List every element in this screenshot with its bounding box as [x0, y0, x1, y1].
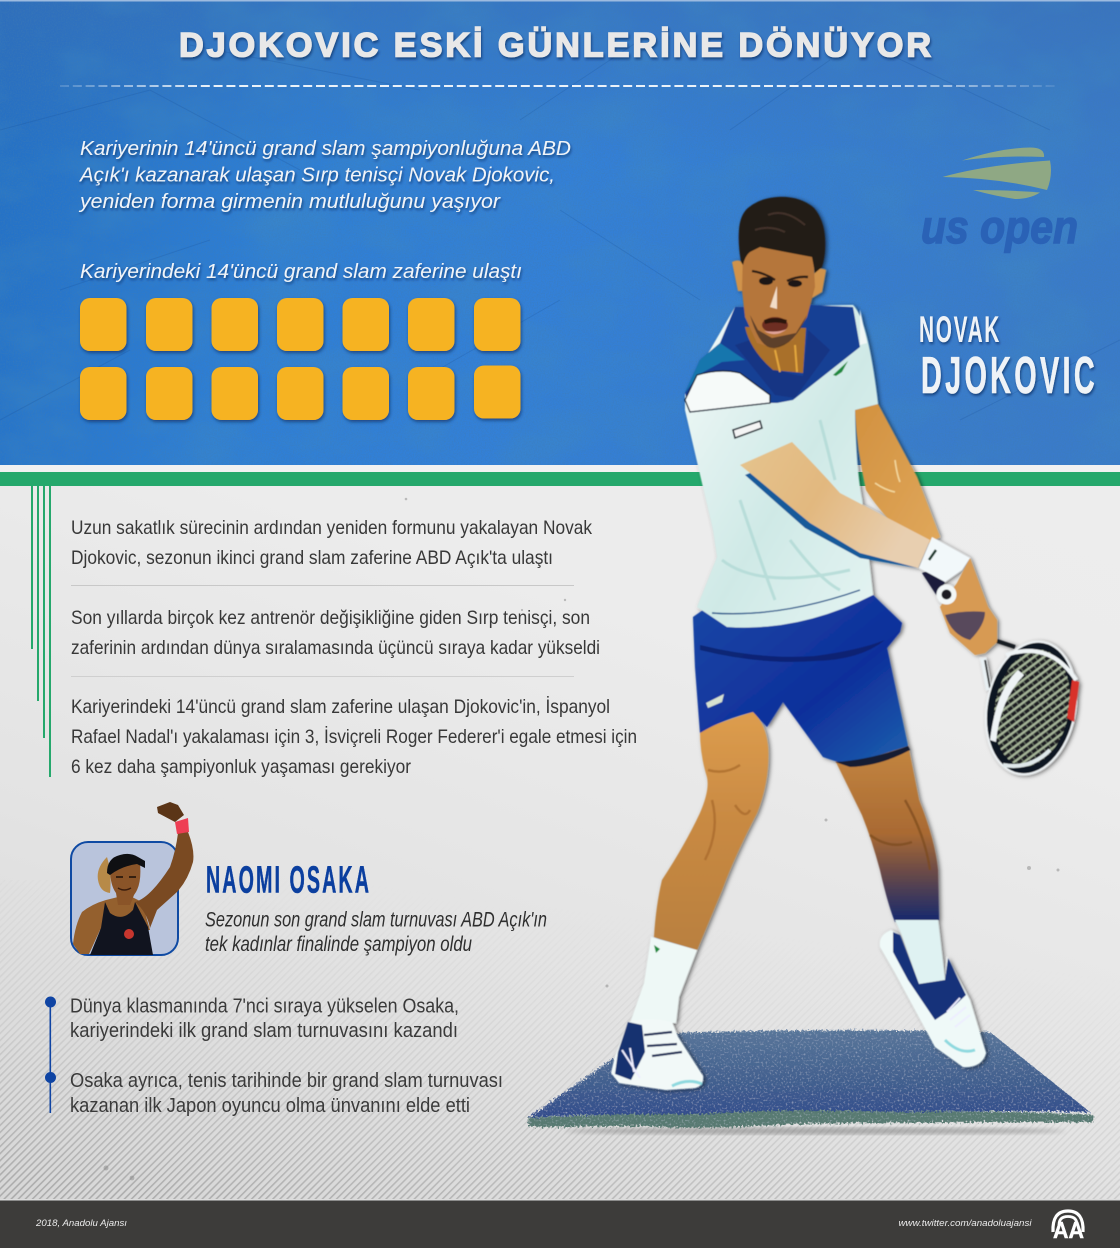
front arm: [740, 442, 930, 568]
racket: [975, 634, 1087, 782]
intro text: yeniden forma girmenin mutluluğunu yaşıyor: [78, 190, 501, 213]
photo: Naomi Osaka: [71, 802, 193, 955]
shoulder and chest: [73, 897, 150, 954]
player name: [919, 309, 1098, 405]
body text: [71, 517, 637, 778]
dashed divider: [60, 85, 1055, 87]
Osaka bullets: kariyerindeki ilk grand slam turnuvasını kazandı: [70, 1020, 458, 1042]
hair: [98, 857, 111, 893]
body text: Son yıllarda birçok kez antrenör değişikliğine giden Sırp tenisçi, son: [71, 607, 590, 629]
wristband: [919, 537, 970, 582]
wristband: [175, 818, 189, 834]
shirt yoke: [685, 305, 860, 412]
right sock: [895, 920, 945, 984]
Osaka bullets: Osaka ayrıca, tenis tarihinde bir grand slam turnuvası: [70, 1070, 503, 1092]
arm: [135, 832, 193, 928]
left shoe: [611, 1019, 703, 1090]
grip and glove area: [922, 570, 945, 596]
dress: [90, 902, 153, 955]
face: [742, 240, 815, 348]
hair: [739, 197, 825, 273]
body text: Djokovic, sezonun ikinci grand slam zaferine ABD Açık'ta ulaştı: [71, 547, 553, 569]
footer source: 2018, Anadolu Ajansı: [35, 1218, 127, 1229]
body text: Uzun sakatlık sürecinin ardından yeniden formunu yakalayan Novak: [71, 517, 592, 539]
green vertical lines: [31, 486, 51, 777]
footer link: www.twitter.com/anadoluajansi: [898, 1218, 1032, 1229]
Osaka subtitle: tek kadınlar finalinde şampiyon oldu: [205, 933, 472, 956]
body text: 6 kez daha şampiyonluk yaşaması gerekiyor: [71, 756, 411, 778]
neck: [745, 327, 806, 373]
icon: Anadolu Agency logo: AA: [1053, 1217, 1084, 1243]
Osaka bullets: kazanan ilk Japon oyuncu olma ünvanını elde etti: [70, 1095, 470, 1117]
lower panel hatch: [0, 498, 1120, 1200]
collar shade: [735, 330, 830, 398]
panel: blue header: [0, 0, 1120, 465]
Osaka bullets: Dünya klasmanında 7'nci sıraya yükselen Osaka,: [70, 996, 459, 1018]
left leg: [654, 712, 768, 950]
logo: US Open: us open: [921, 201, 1078, 253]
visor: [107, 854, 145, 875]
fist: [157, 802, 184, 822]
grand slam tally squares: [80, 298, 520, 420]
shirt: [685, 305, 878, 628]
Osaka bullet timeline: [45, 996, 56, 1113]
intro text: Açık'ı kazanarak ulaşan Sırp tenisçi Novak Djokovic,: [78, 164, 555, 186]
logo: US Open: [921, 148, 1078, 253]
intro text: [78, 137, 571, 213]
shorts: [693, 595, 908, 765]
figure: Novak Djokovic: [611, 197, 1087, 1090]
face: [110, 863, 140, 905]
left sock: [630, 937, 697, 1023]
heading: Naomi Osaka: NAOMI OSAKA: [206, 860, 371, 902]
back arm: [855, 404, 940, 548]
hand: [940, 558, 997, 655]
Osaka bullets: [70, 996, 503, 1117]
ears: [732, 261, 746, 291]
player name: NOVAK: [919, 309, 1001, 350]
body text: Rafael Nadal'ı yakalaması için 3, İsviçreli Roger Federer'i egale etmesi için: [71, 725, 637, 748]
body text: zaferinin ardından dünya sıralamasında üçüncü sıraya kadar yükseldi: [71, 637, 600, 659]
intro text: Kariyerinin 14'üncü grand slam şampiyonluğuna ABD: [80, 137, 571, 160]
Osaka subtitle: Sezonun son grand slam turnuvası ABD Açık'ın: [205, 908, 547, 932]
Osaka subtitle: [205, 908, 547, 956]
trophies caption: Kariyerindeki 14'üncü grand slam zaferine ulaştı: [80, 260, 522, 283]
title: DJOKOVIC ESKİ GÜNLERİNE DÖNÜYOR: [179, 26, 934, 64]
right shoe: [880, 930, 986, 1067]
footer bar: [0, 1199, 1120, 1248]
tennis court carpet: [528, 1030, 1093, 1134]
right leg: [835, 745, 939, 922]
green stripe: [0, 465, 1120, 486]
body text: Kariyerindeki 14'üncü grand slam zaferine ulaşan Djokovic'in, İspanyol: [71, 695, 610, 718]
